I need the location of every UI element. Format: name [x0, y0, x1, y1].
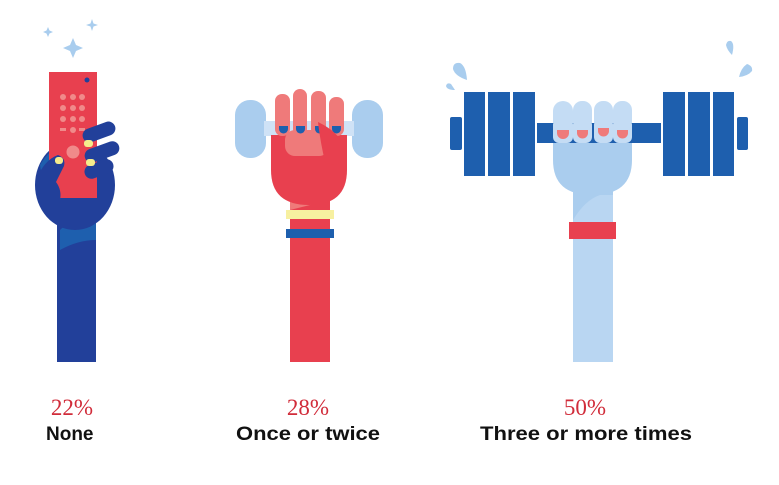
- figure: hand with remote (None): [35, 19, 121, 362]
- arm: [573, 185, 613, 362]
- hand: [35, 140, 115, 230]
- arm: [57, 195, 96, 362]
- label: 22% None: None: [46, 424, 94, 445]
- label: 50% Three or more times: Three or more times: [480, 424, 692, 445]
- label: 28% Once or twice: 28%: [287, 395, 329, 420]
- label: 22% None: 22%: [51, 395, 93, 420]
- label: 50% Three or more times: [480, 395, 692, 445]
- label: 28% Once or twice: Once or twice: [236, 424, 380, 445]
- remote: [49, 72, 97, 198]
- fingers: [36, 120, 121, 205]
- arm: [290, 195, 330, 362]
- label: 50% Three or more times: 50%: [564, 395, 606, 420]
- sweat drops: [446, 41, 752, 90]
- label: 22% None: [46, 395, 94, 445]
- barbell: [537, 123, 661, 143]
- bands: [286, 210, 334, 219]
- fist: [271, 135, 347, 205]
- dumbbell: [235, 100, 266, 158]
- band: [569, 222, 616, 239]
- icon: sparkles: [43, 19, 98, 58]
- label: 28% Once or twice: [236, 395, 380, 445]
- figure: fist with small dumbbell (Once or twice): [235, 89, 383, 362]
- figure: fist lifting barbell (Three or more times): [446, 41, 752, 362]
- hand: [553, 130, 632, 195]
